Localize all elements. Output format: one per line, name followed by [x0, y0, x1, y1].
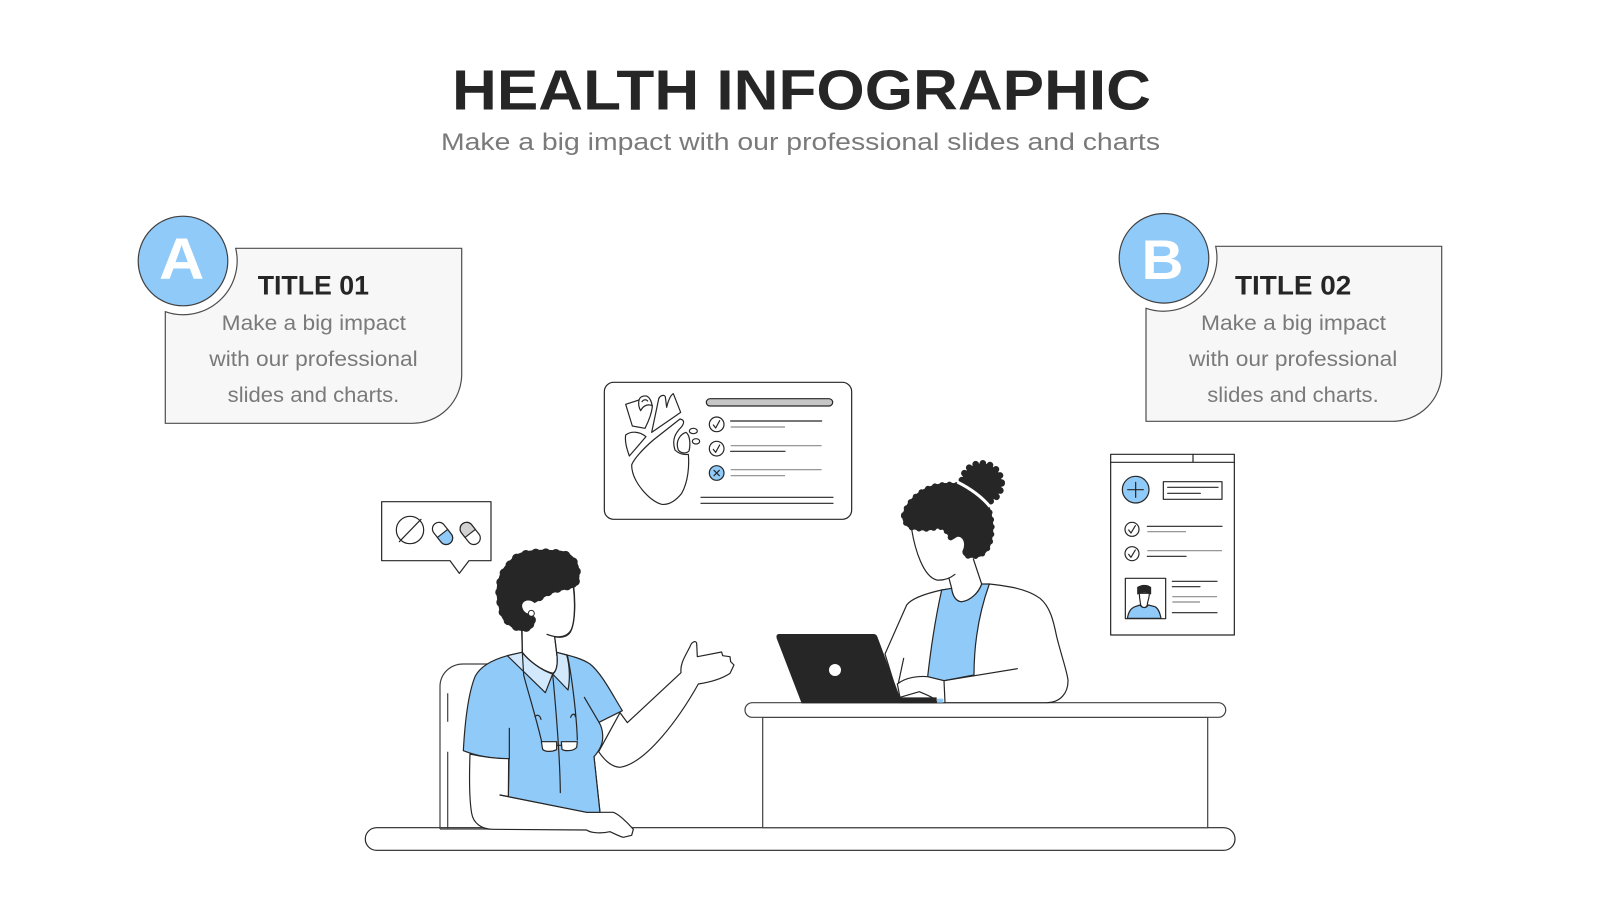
woman doctor [776, 463, 1068, 703]
panel: title 01: slides and charts. [228, 384, 399, 407]
blue top [928, 584, 989, 681]
shirt [463, 652, 622, 812]
panel: title 02: with our professional [1188, 348, 1397, 371]
panel: title 01: A [159, 227, 204, 292]
neck and face [522, 583, 575, 673]
speech bubble: medication [382, 502, 491, 573]
name box [1163, 482, 1222, 499]
icon: heart [625, 394, 700, 504]
check rows [1125, 522, 1222, 561]
icon: no tablet [396, 516, 424, 544]
panel: title 02 [1119, 213, 1442, 421]
panel: title 02: Make a big impact [1201, 312, 1386, 335]
icon: plus [1122, 476, 1149, 503]
subtitle: Make a big impact with our professional slides and charts [441, 129, 1160, 156]
checklist [701, 417, 833, 503]
icon: capsule blue [430, 520, 455, 547]
panel: title 02: slides and charts. [1207, 384, 1379, 407]
panel: title 02: TITLE 02 [1235, 271, 1351, 301]
laptop [776, 634, 937, 703]
raised arm [599, 642, 734, 767]
heart report card [604, 382, 852, 519]
panel: title 01 [138, 216, 462, 423]
man patient [463, 553, 734, 837]
collar [507, 652, 553, 693]
arm detail [898, 658, 1017, 683]
medical record document [1111, 454, 1234, 635]
report header bar [706, 399, 833, 406]
coat [885, 584, 1068, 703]
lower arm [470, 754, 633, 837]
hair [500, 553, 576, 628]
title: HEALTH INFOGRAPHIC [452, 58, 1151, 122]
stethoscope and placket [522, 652, 577, 793]
icon: capsule grey [457, 520, 483, 547]
hair [904, 463, 1002, 556]
patient photo [1125, 578, 1166, 619]
panel: title 01: Make a big impact [222, 312, 406, 335]
hand [897, 676, 945, 703]
chair [440, 664, 490, 829]
detail lines [1172, 581, 1217, 613]
panel: title 02: B [1142, 228, 1184, 291]
panel: title 01: with our professional [208, 348, 418, 371]
floor platform [365, 828, 1235, 850]
panel: title 01: TITLE 01 [258, 271, 369, 301]
desk [745, 703, 1226, 828]
face and neck [912, 527, 982, 602]
